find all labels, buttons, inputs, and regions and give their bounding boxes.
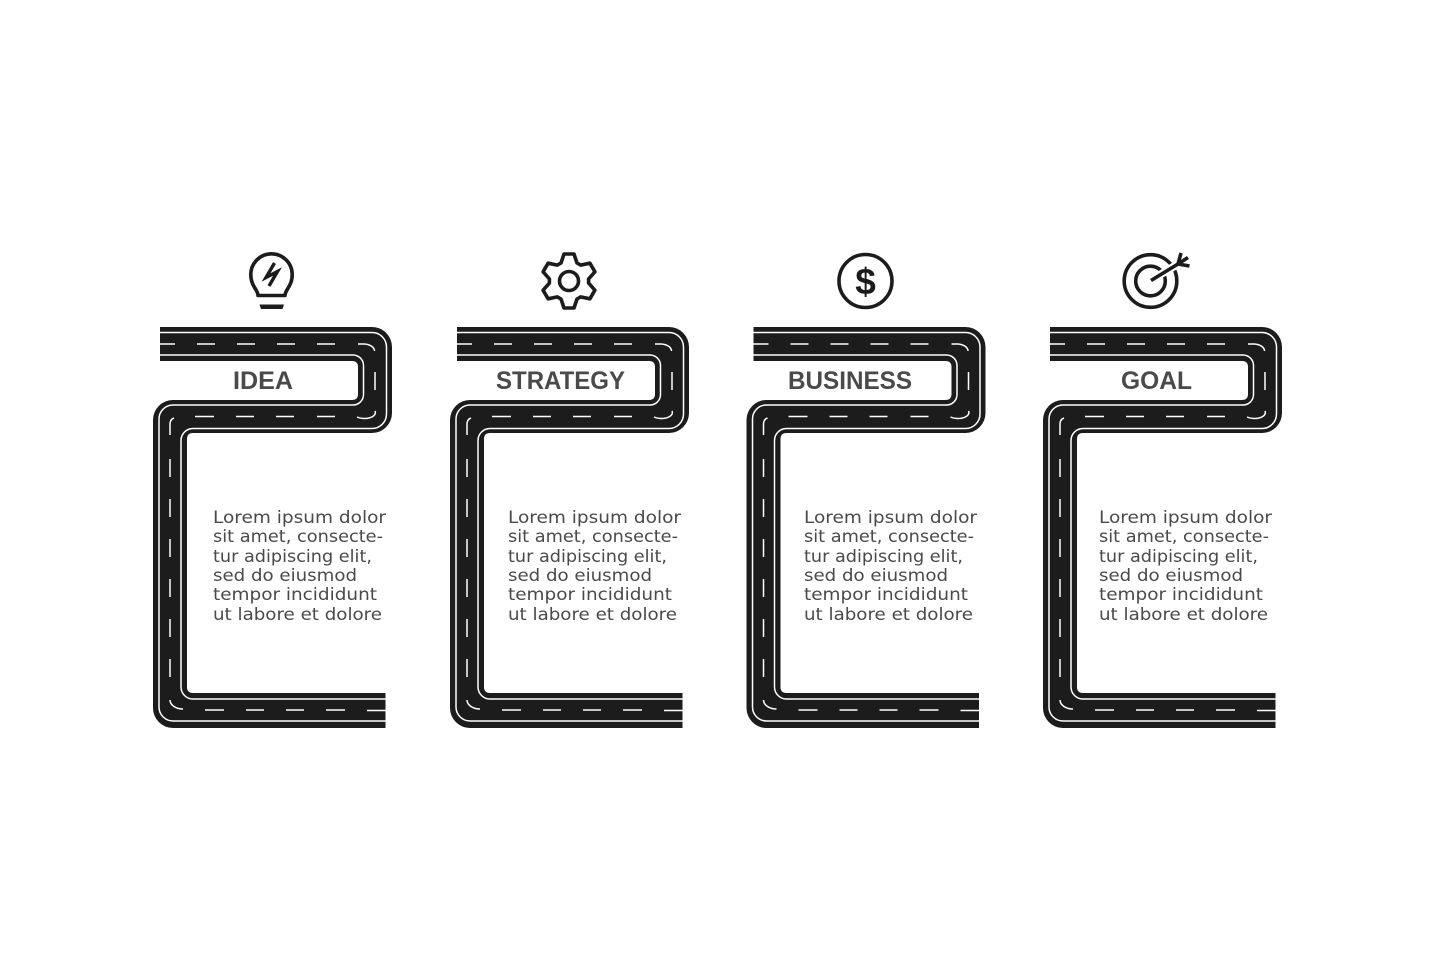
text block: goal [1099, 508, 1273, 625]
text block: idea: tempor incididunt [213, 585, 377, 605]
text block: business: sed do eiusmod [804, 566, 948, 586]
label: BUSINESS: BUSINESS [788, 367, 912, 395]
text block: business [804, 508, 978, 625]
text block: business: tempor incididunt [804, 585, 968, 605]
text block: idea [213, 508, 387, 625]
text block: strategy: tempor incididunt [508, 585, 672, 605]
road: strategy [450, 327, 689, 728]
text block: idea: sed do eiusmod [213, 566, 357, 586]
icon: dollar coin: $ [855, 261, 876, 302]
label: IDEA: IDEA [233, 367, 293, 395]
text block: idea: sit amet, consecte- [213, 527, 383, 547]
text block: idea: Lorem ipsum dolor [213, 508, 387, 528]
text block: idea: ut labore et dolore [213, 605, 382, 625]
road: goal [1043, 327, 1282, 728]
text block: business: sit amet, consecte- [804, 527, 974, 547]
text block: strategy: sit amet, consecte- [508, 527, 678, 547]
text block: business: ut labore et dolore [804, 605, 973, 625]
icon: target with arrow [1124, 253, 1190, 307]
text block: goal: tempor incididunt [1099, 585, 1263, 605]
label: GOAL: GOAL [1121, 367, 1192, 395]
step 1: idea [153, 254, 392, 728]
text block: strategy: tur adipiscing elit, [508, 547, 667, 567]
icon: light bulb [251, 254, 292, 309]
step 3: business [746, 254, 986, 728]
text block: business: tur adipiscing elit, [804, 547, 963, 567]
text block: business: Lorem ipsum dolor [804, 508, 978, 528]
text block: strategy [508, 508, 682, 625]
text block: strategy: sed do eiusmod [508, 566, 652, 586]
road: idea [153, 327, 392, 728]
text block: goal: ut labore et dolore [1099, 605, 1268, 625]
step 2: strategy [450, 254, 689, 728]
text block: strategy: Lorem ipsum dolor [508, 508, 682, 528]
text block: goal: tur adipiscing elit, [1099, 547, 1258, 567]
text block: idea: tur adipiscing elit, [213, 547, 372, 567]
text block: goal: sed do eiusmod [1099, 566, 1243, 586]
text block: strategy: ut labore et dolore [508, 605, 677, 625]
text block: goal: sit amet, consecte- [1099, 527, 1269, 547]
icon: dollar coin [839, 254, 892, 308]
step 4: goal [1043, 253, 1282, 728]
road: business [746, 327, 986, 728]
text block: goal: Lorem ipsum dolor [1099, 508, 1273, 528]
icon: gear [543, 254, 595, 308]
label: STRATEGY: STRATEGY [496, 367, 625, 395]
